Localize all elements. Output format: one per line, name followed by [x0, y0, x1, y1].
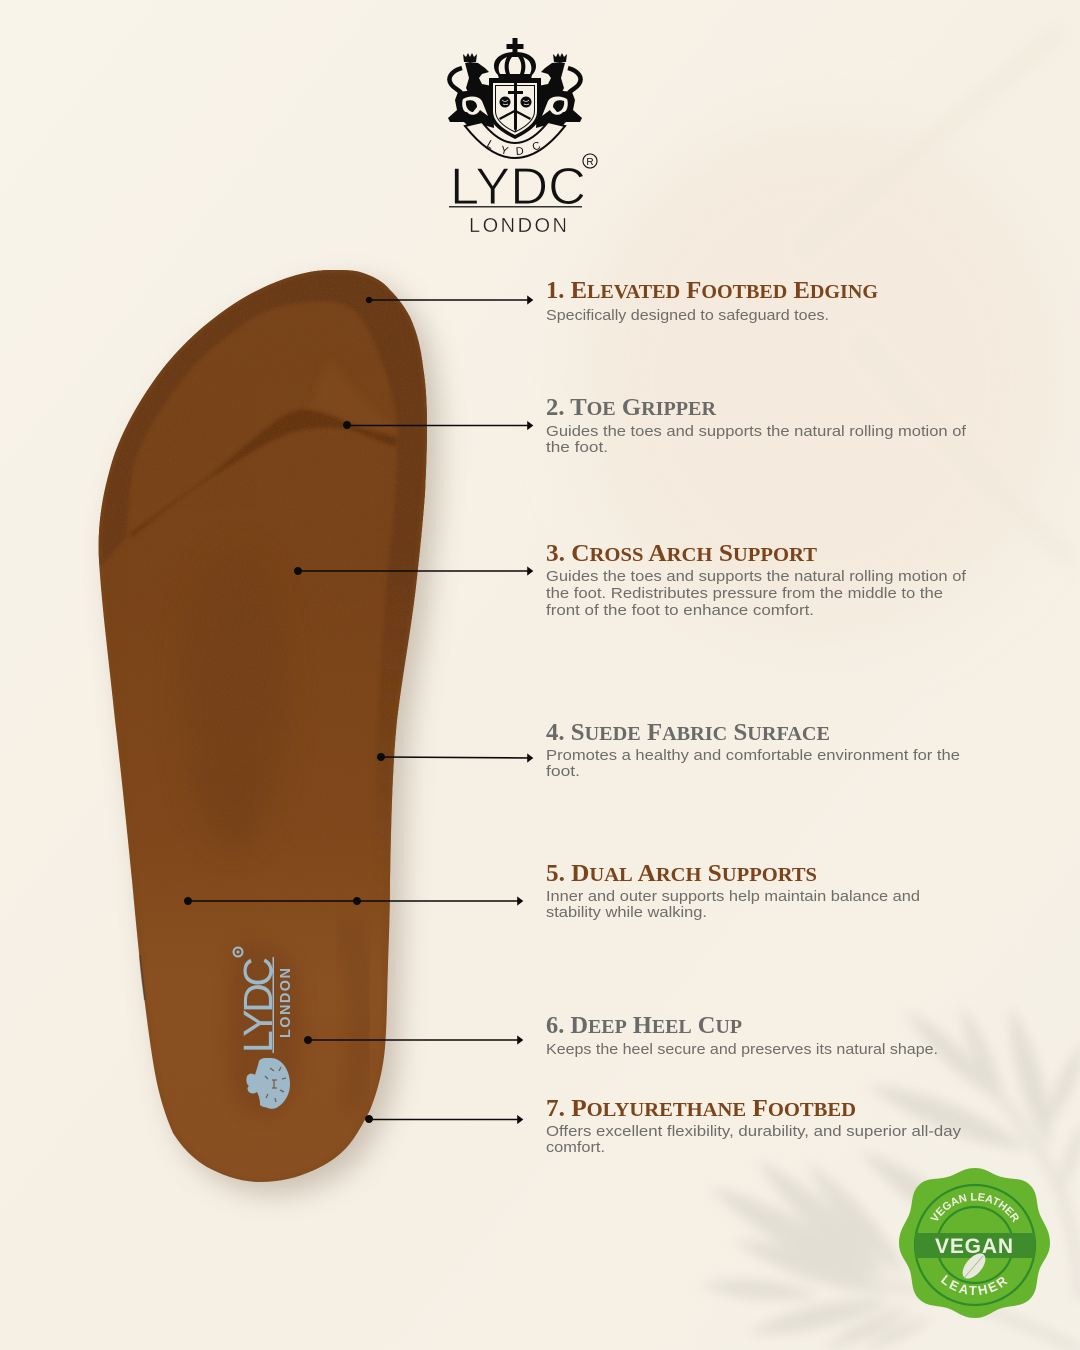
- wordmark: LYDC: [450, 158, 586, 216]
- feature 6: 6. Deep Heel Cup: [546, 1009, 742, 1040]
- arrow 3: [294, 567, 532, 575]
- feature 1: 1. Elevated Footbed Edging: [546, 274, 878, 305]
- insole shadow: [111, 282, 439, 1194]
- logo: LYDC London crest: [448, 38, 597, 237]
- toe gripper ridge: [128, 409, 397, 536]
- dark outer sole strip: [140, 955, 145, 1000]
- badge scalloped seal: [899, 1168, 1050, 1318]
- feature 3: Guides the toes and supports the natural rolling motion of: [546, 568, 967, 585]
- heel logo print: [234, 948, 294, 1109]
- feature 4: foot.: [546, 763, 580, 780]
- registered mark: R: [586, 157, 594, 168]
- badge text: VEGAN: [935, 1235, 1013, 1258]
- print: crest: [246, 1058, 290, 1109]
- feature 2: the foot.: [546, 439, 608, 456]
- insole: [70, 250, 445, 1194]
- feature 3: [546, 537, 967, 619]
- badge bottom arc text: LEATHER: [940, 1274, 1008, 1295]
- arrow 5 with two dots: [184, 897, 522, 905]
- feature 5: [546, 857, 920, 921]
- badge outer ring: [915, 1185, 1035, 1305]
- feature 4: [546, 716, 960, 780]
- feature 2: [546, 391, 967, 456]
- feature 7: 7. Polyurethane Footbed: [546, 1092, 856, 1123]
- toe ridge highlight: [307, 357, 394, 436]
- icon: leaf: [958, 1249, 990, 1283]
- icon: crest: [448, 38, 582, 158]
- scroll letters: C: [531, 140, 543, 154]
- feature 1: Specifically designed to safeguard toes.: [546, 307, 829, 324]
- feature 7: comfort.: [546, 1139, 605, 1156]
- feature 4: 4. Suede Fabric Surface: [546, 716, 830, 747]
- scroll letters: [484, 138, 543, 158]
- arrow 4: [377, 753, 532, 761]
- arrow 6: [304, 1036, 522, 1044]
- wordmark subline: LONDON: [469, 215, 567, 237]
- badge: vegan leather: [899, 1168, 1050, 1318]
- cross arch depression: [208, 762, 254, 824]
- feature 5: Inner and outer supports help maintain balance and: [546, 888, 920, 905]
- palm leaf shadow, lower right: [699, 1002, 1080, 1350]
- feature 1: [546, 274, 878, 324]
- feature 2: 2. Toe Gripper: [546, 391, 717, 422]
- feature 3: front of the foot to enhance comfort.: [546, 602, 814, 619]
- print: registered: [234, 948, 242, 956]
- arrow 1: [366, 297, 532, 303]
- feature 3: the foot. Redistributes pressure from the middle to the: [546, 585, 943, 602]
- print: wordmark: LYDC: [235, 957, 281, 1053]
- keys: [499, 110, 531, 120]
- heel right tone: [345, 920, 361, 1110]
- feature 7: Offers excellent flexibility, durability, and superior all-day: [546, 1123, 962, 1140]
- heel cup inner tone: [228, 942, 301, 1115]
- left lion: [448, 53, 494, 128]
- feature 2: Guides the toes and supports the natural rolling motion of: [546, 423, 967, 440]
- scroll: [465, 122, 565, 158]
- feature 7: [546, 1092, 962, 1156]
- wordmark rule: [449, 206, 582, 208]
- badge band: [915, 1233, 1035, 1258]
- insole surface: [98, 270, 427, 1182]
- feature 4: Promotes a healthy and comfortable environment for the: [546, 747, 960, 764]
- badge inner ring: [937, 1207, 1013, 1283]
- right lion: [536, 53, 582, 128]
- lighter rim edge: [99, 270, 427, 1182]
- arrow 2: [343, 421, 532, 429]
- roses: [500, 96, 510, 108]
- raised rim around toe area: [98, 270, 427, 826]
- sword: [508, 83, 523, 132]
- print: London: LONDON: [278, 968, 294, 1038]
- shield: [489, 78, 541, 139]
- scroll letters: Y: [499, 144, 510, 158]
- registered mark: [583, 154, 597, 168]
- badge top arc text: VEGAN LEATHER: [930, 1193, 1019, 1223]
- scroll letters: L: [484, 138, 496, 152]
- feature 3: 3. Cross Arch Support: [546, 537, 818, 568]
- crown: [494, 38, 536, 79]
- suede texture: [90, 260, 435, 1190]
- feature 6: [546, 1009, 938, 1058]
- feature 5: 5. Dual Arch Supports: [546, 857, 817, 888]
- scroll letters: D: [515, 145, 524, 158]
- print: rule: [272, 957, 274, 1053]
- feature 6: Keeps the heel secure and preserves its natural shape.: [546, 1041, 938, 1058]
- arrow 7: [365, 1115, 522, 1123]
- feature 5: stability while walking.: [546, 904, 707, 921]
